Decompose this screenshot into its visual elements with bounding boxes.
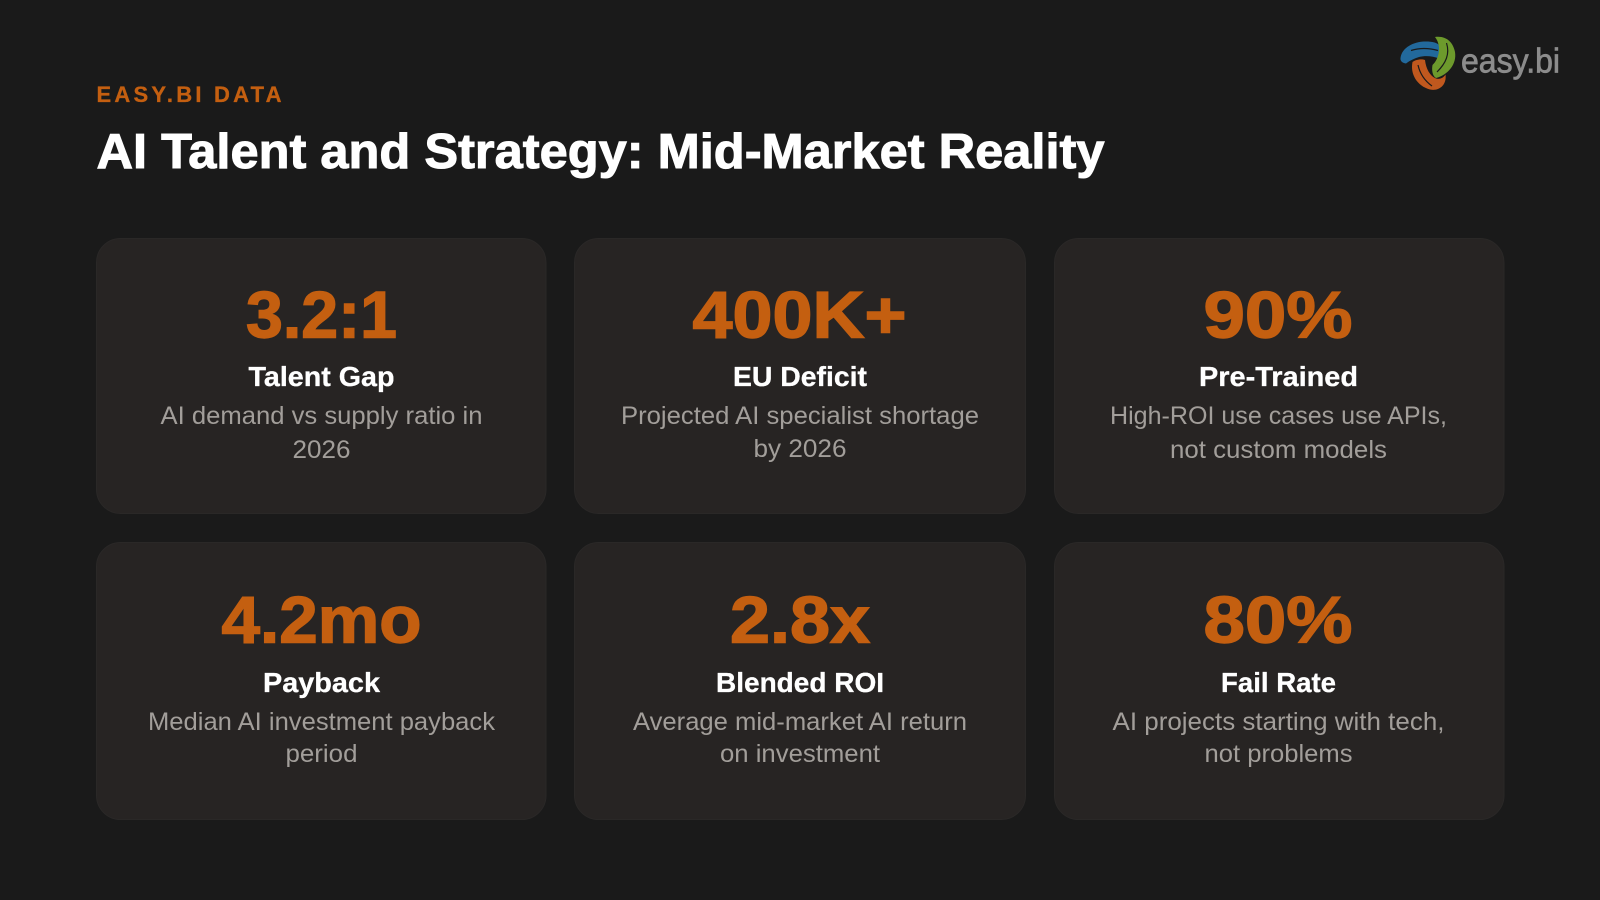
description: not custom models	[1170, 436, 1387, 464]
description: by 2026	[754, 435, 846, 463]
stat label: Fail Rate	[1221, 667, 1336, 698]
description: not problems	[1204, 740, 1352, 768]
panel: Payback	[96, 542, 546, 820]
description: Average mid-market AI return	[633, 708, 967, 736]
stat value: 400K+	[692, 278, 906, 352]
description	[160, 402, 483, 464]
stat label: Talent Gap	[248, 361, 394, 392]
panel: Blended ROI	[574, 542, 1026, 820]
description: AI demand vs supply ratio in	[160, 402, 483, 430]
eyebrow: EASY.BI DATA	[96, 82, 282, 107]
description: High-ROI use cases use APIs,	[1110, 402, 1447, 430]
icon: blue band	[1400, 41, 1439, 64]
stat value: 80%	[1204, 582, 1352, 656]
description	[1110, 402, 1447, 464]
description	[1112, 708, 1444, 768]
stat label: Blended ROI	[716, 667, 884, 698]
description: AI projects starting with tech,	[1112, 708, 1444, 736]
icon: orange band	[1412, 59, 1446, 90]
stat value: 90%	[1204, 278, 1352, 352]
stat value: 3.2:1	[246, 278, 397, 352]
description: Median AI investment payback	[148, 708, 496, 736]
panel: Talent Gap	[96, 238, 546, 514]
title: AI Talent and Strategy: Mid-Market Reality	[96, 125, 1104, 179]
description: period	[286, 740, 358, 768]
panel: Fail Rate	[1054, 542, 1504, 820]
stat value: 4.2mo	[222, 582, 422, 656]
description	[621, 402, 979, 463]
logo wordmark: easy.bi	[1461, 42, 1560, 80]
stat value: 2.8x	[730, 582, 870, 656]
logo: easy.bi	[1400, 37, 1560, 90]
stat label: Pre-Trained	[1199, 361, 1358, 392]
description	[148, 708, 496, 768]
stat label: EU Deficit	[733, 361, 867, 392]
panel: EU Deficit	[574, 238, 1026, 514]
stat label: Payback	[263, 667, 380, 698]
icon: green band	[1432, 37, 1455, 78]
description: Projected AI specialist shortage	[621, 402, 979, 430]
description	[633, 708, 967, 768]
panel: Pre-Trained	[1054, 238, 1504, 514]
description: on investment	[720, 740, 880, 768]
description: 2026	[292, 436, 350, 464]
